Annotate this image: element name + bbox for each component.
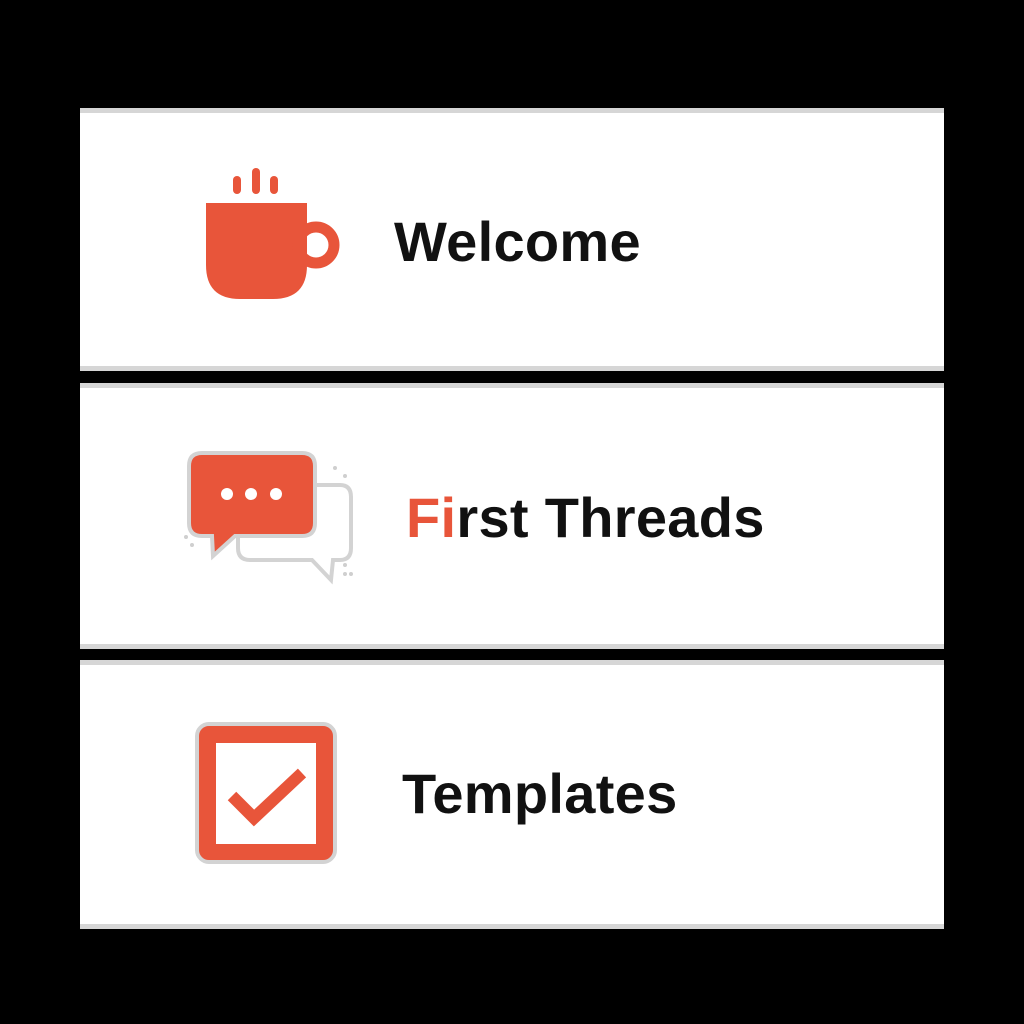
heading: First Threads: First Threads xyxy=(406,486,765,549)
panel: first threads xyxy=(80,383,944,649)
icon: coffee cup xyxy=(206,168,334,299)
icon: checkbox xyxy=(197,724,335,862)
icon: chat bubbles xyxy=(184,453,353,580)
panel: welcome xyxy=(80,108,944,371)
heading: Welcome: Welcome xyxy=(394,210,641,273)
panel: templates xyxy=(80,660,944,929)
heading: Templates: Templates xyxy=(402,762,678,825)
